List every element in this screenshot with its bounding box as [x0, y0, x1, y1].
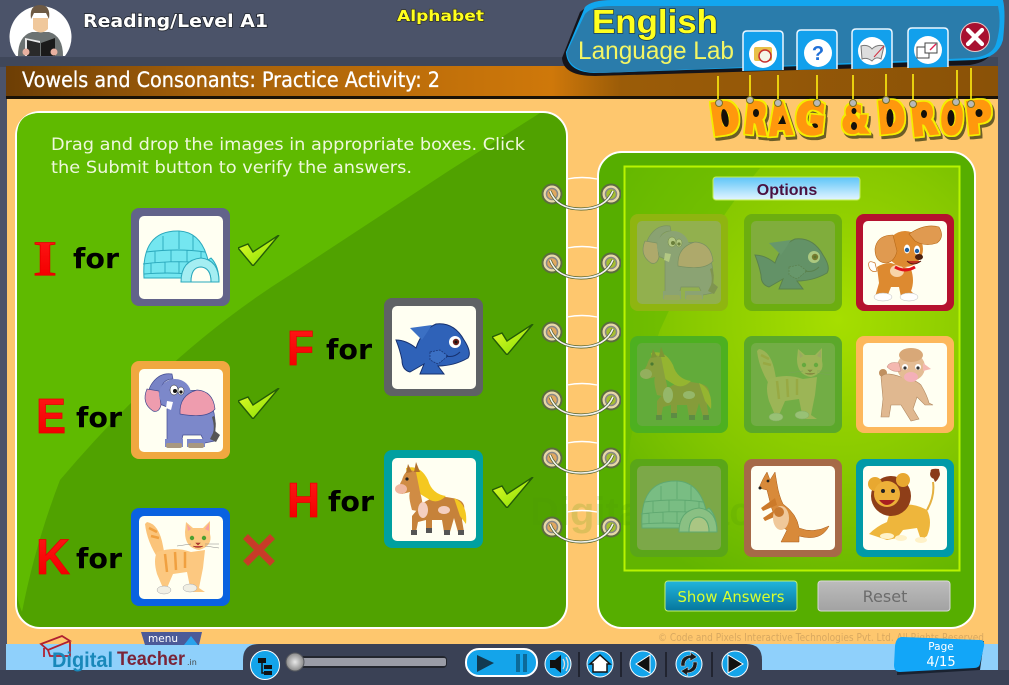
- heading: level: Reading/Level A1: [83, 11, 268, 32]
- row: F for fish: [287, 298, 533, 396]
- row: E for elephant: for: [76, 401, 122, 434]
- tab: help: [797, 30, 837, 70]
- button: reset: Reset: [863, 587, 907, 606]
- option: kangaroo: [744, 459, 842, 557]
- Drag and Drop banner: G: [793, 93, 827, 144]
- Drag and Drop banner: [708, 68, 994, 145]
- peach stage background: [7, 98, 998, 646]
- row: K for cat (wrong): K: [36, 529, 70, 585]
- button: tree menu: [250, 650, 280, 680]
- left panel: matching area: [16, 112, 567, 628]
- button: reset: [818, 581, 950, 611]
- heading: activity title: Vowels and Consonants: Practice Activity: 2: [22, 68, 440, 92]
- row: K for cat (wrong): for: [76, 542, 122, 575]
- close button: [960, 22, 990, 52]
- instruction text: the Submit button to verify the answers.: [51, 158, 412, 178]
- tab: book: [852, 29, 892, 69]
- tab: bookmark: [743, 31, 783, 71]
- options label: Options: [757, 182, 817, 199]
- button: audio: [545, 651, 571, 677]
- avatar: reading student: [10, 5, 72, 56]
- menu tab: menu: [148, 633, 178, 645]
- button: show answers: Show Answers: [678, 588, 785, 606]
- option: sheep: [856, 336, 954, 433]
- instruction text: Drag and drop the images in appropriate boxes. Click: [51, 135, 525, 155]
- logo text: Language Lab: Language Lab: [578, 37, 734, 65]
- menu tab: [141, 632, 202, 645]
- option: cat used: [744, 336, 842, 433]
- row: E for elephant: E: [36, 390, 66, 444]
- row: H for horse: for: [328, 485, 374, 518]
- logo: Digital Teacher: [41, 636, 197, 672]
- spiral binder rings: [542, 178, 620, 542]
- button: back: [630, 651, 656, 677]
- row: E for elephant: [36, 361, 279, 459]
- option: elephant used: [630, 214, 728, 311]
- control bar: [243, 644, 762, 685]
- heading: topic: Alphabet: [397, 7, 484, 25]
- Drag and Drop banner: D: [876, 92, 907, 143]
- row: H for horse: [287, 450, 533, 548]
- page counter: 4/15: [926, 655, 956, 670]
- option: horse used: [630, 336, 728, 433]
- right panel: options: [530, 152, 975, 628]
- logo: Digital Teacher: .in: [187, 658, 197, 667]
- row: H for horse: H: [287, 474, 320, 528]
- option: dog: [856, 214, 954, 311]
- row: I for igloo: [33, 208, 279, 306]
- title bar: [6, 66, 998, 99]
- logo: Digital Teacher: Digital: [52, 649, 113, 672]
- logo text: English: English: [592, 3, 718, 40]
- instruction text: [51, 135, 525, 178]
- band under header: [0, 57, 1009, 67]
- row: I for igloo: I: [33, 230, 57, 286]
- Drag and Drop banner: R: [742, 93, 769, 144]
- row: I for igloo: for: [73, 242, 119, 275]
- button: home: [587, 651, 613, 677]
- logo: Digital Teacher: Teacher: [117, 649, 186, 670]
- row: F for fish: F: [287, 322, 314, 376]
- Drag and Drop banner: R: [909, 94, 939, 145]
- option: lion: [856, 459, 954, 557]
- Drag and Drop banner: A: [767, 94, 793, 145]
- left frame: [0, 67, 6, 670]
- option: igloo used: [630, 459, 728, 557]
- watermark: Digital Teacher: [530, 490, 814, 534]
- right frame: [998, 0, 1009, 685]
- row: F for fish: for: [326, 333, 372, 366]
- Drag and Drop banner: P: [963, 92, 994, 143]
- tab: resize: [908, 28, 948, 68]
- option: fish used: [744, 214, 842, 311]
- progress slider: [286, 653, 447, 671]
- button: replay: [676, 651, 702, 677]
- header panel: English Language Lab: [562, 0, 1004, 76]
- Drag and Drop banner: &: [842, 100, 868, 141]
- button: show answers: [665, 581, 797, 611]
- page counter: [894, 637, 984, 675]
- Drag and Drop banner: O: [939, 93, 965, 144]
- bottom light blue bar: [6, 644, 998, 670]
- row: K for cat (wrong): [36, 508, 270, 606]
- Drag and Drop banner: D: [708, 92, 742, 145]
- tab: help: ?: [812, 43, 824, 65]
- page counter: Page: [928, 641, 954, 653]
- play pause pill: [466, 649, 537, 676]
- bottom dark strip: [0, 670, 1009, 685]
- options label: [713, 177, 860, 200]
- button: next: [722, 651, 748, 677]
